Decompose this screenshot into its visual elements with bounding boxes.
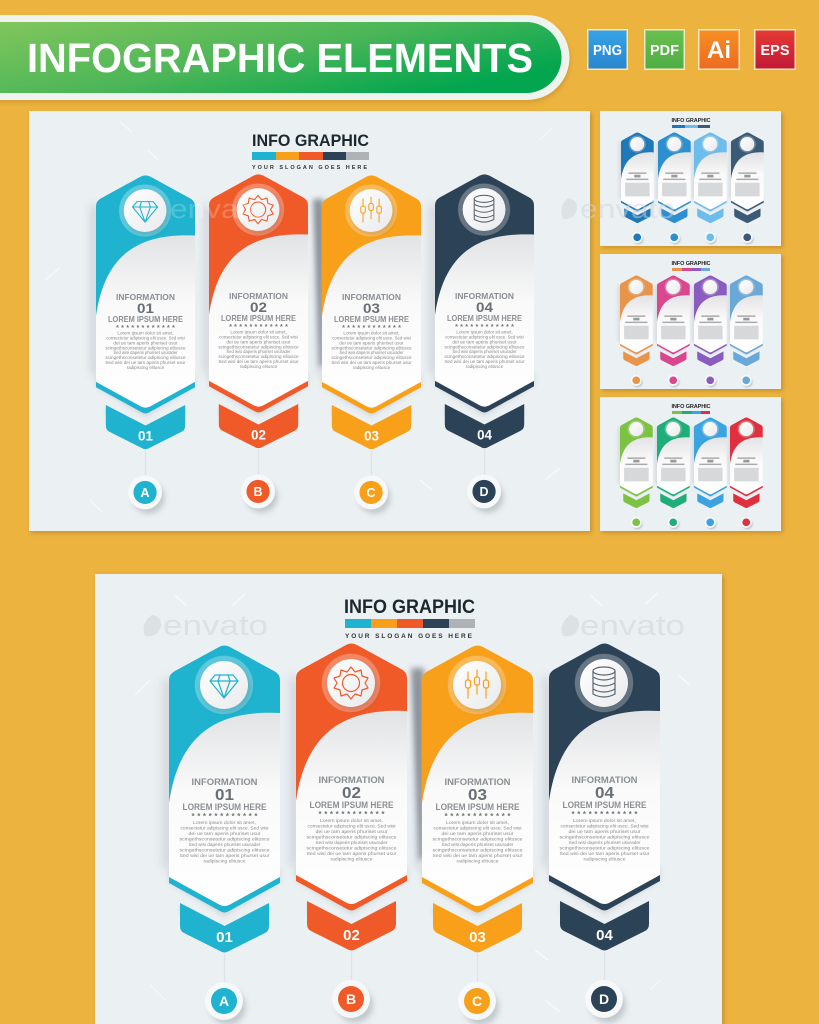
text block: radipiscing elitusce (330, 856, 373, 862)
icon: coin stack (474, 195, 494, 222)
text block: Lorem ipsum dolor sit amet, (193, 820, 256, 825)
mini card 1 (618, 275, 653, 387)
text block: INFORMATION (572, 775, 638, 785)
text block: INFORMATION (116, 293, 175, 302)
text block: LOREM IPSUM HERE (562, 800, 646, 810)
text block (105, 293, 186, 370)
text block: INFORMATION (455, 292, 514, 301)
text block: scingethsconsetetur adipiscing elitusce (560, 834, 650, 840)
text block (180, 777, 270, 864)
watermark: envato (170, 194, 265, 224)
text block: dei ue tam aperis phuriset usur (452, 339, 517, 344)
tab number: 03 (364, 429, 379, 444)
text block: scingethsconsetetur adipiscing elitusce (105, 345, 186, 350)
text block: consectetur adipiscing elit usce. Sed wisi (219, 334, 298, 339)
text block: Sed wisi daperis phuriset usurader (113, 350, 178, 355)
text block: dei ue tam aperis phuriset usur (188, 831, 261, 836)
card 02 (204, 174, 308, 513)
text block: 03 (363, 301, 380, 317)
heading: INFO GRAPHIC (252, 131, 369, 150)
mini card 4 (729, 132, 764, 244)
text block: Lorem ipsum dolor sit amet, (446, 820, 509, 825)
tab number: 03 (469, 929, 486, 946)
text block: scingethsconsetetur adipiscing elitusce (105, 355, 186, 360)
mini card 4 (728, 417, 763, 529)
text block: 02 (250, 300, 267, 316)
text block: scingethsconsetetur adipiscing elitusce (218, 354, 299, 359)
letter marker: C (472, 993, 482, 1009)
format badge: EPS (754, 29, 796, 70)
text block (331, 293, 412, 370)
text block: radipiscing elitusce (353, 365, 391, 370)
text block: Sed wisi dei ue tam aperis phurset usur (306, 851, 397, 856)
card 01 (91, 175, 195, 514)
watermark: envato (580, 194, 675, 224)
text block: LOREM IPSUM HERE (108, 315, 184, 324)
heading (344, 597, 475, 640)
text block: Sed wisi daperis phuriset usurader (442, 842, 514, 847)
format badge: Ai (698, 29, 740, 70)
panel: large preview (95, 574, 724, 1024)
text block: scingethsconsetetur adipiscing elitusce (180, 848, 270, 852)
text block (444, 292, 525, 369)
colour bar (252, 152, 369, 160)
letter marker: D (599, 991, 609, 1007)
format badge: EPS: EPS (760, 42, 790, 59)
format badge: PDF (644, 29, 685, 70)
text block: ************ (318, 810, 385, 819)
mini colour bar (672, 125, 710, 128)
text block: 04 (476, 300, 493, 316)
text block: radipiscing elitusce (584, 856, 626, 862)
text block: LOREM IPSUM HERE (436, 802, 520, 812)
text block: 01 (137, 301, 154, 317)
text block: scingethsconsetetur adipiscing elitusce (331, 345, 412, 350)
text block: scingethsconsetetur adipiscing elitusce (218, 344, 299, 349)
mini card 2 (655, 417, 690, 529)
title banner (0, 15, 570, 103)
text block: dei ue tam aperis phuriset usur (339, 340, 404, 345)
heading: INFO GRAPHIC (344, 597, 475, 618)
text block: scingethsconsetetur adipiscing elitusce (306, 846, 397, 850)
text block: 02 (342, 785, 361, 802)
icon: sliders (361, 197, 381, 222)
banner title text: INFOGRAPHIC ELEMENTS (27, 35, 533, 81)
text block: dei ue tam aperis phuriset usur (442, 831, 514, 836)
text block: radipiscing elitusce (127, 365, 165, 370)
text block (432, 777, 523, 864)
mini colour bar (672, 411, 710, 414)
text block: Lorem ipsum dolor sit amet, (117, 331, 174, 336)
mini heading: INFO GRAPHIC (672, 261, 711, 267)
letter marker: A (219, 993, 229, 1009)
letter marker: C (367, 486, 376, 500)
card 04 (543, 644, 660, 1023)
colour bar (345, 619, 475, 628)
text block: Sed wisi daperis phuriset usurader (316, 840, 388, 845)
tab number: 02 (343, 927, 360, 944)
text block: INFORMATION (229, 292, 288, 301)
mini card 3 (692, 132, 727, 244)
letter marker: A (141, 486, 150, 500)
mini card 1 (619, 132, 654, 244)
mini heading: INFO GRAPHIC (672, 404, 711, 410)
text block: dei ue tam aperis phuriset usur (113, 340, 178, 345)
text block: ************ (342, 324, 401, 332)
card 03 (313, 175, 421, 514)
text block: scingethsconsetetur adipiscing elitusce (444, 344, 525, 349)
text block: consectetur adipiscing elit usce. Sed wisi (560, 824, 648, 828)
panel: main preview (29, 111, 592, 533)
icon: sliders (466, 670, 488, 698)
text block: scingethsconsetetur adipiscing elitusce (432, 848, 523, 852)
text block: Sed wisi daperis phuriset usurader (339, 350, 404, 355)
watermark (144, 610, 268, 642)
panel: green variant (600, 397, 783, 533)
text block: radipiscing elitusce (240, 364, 278, 369)
letter marker: B (346, 991, 356, 1007)
text block: LOREM IPSUM HERE (310, 800, 394, 810)
icon: diamond (133, 202, 158, 222)
slogan: YOUR SLOGAN GOES HERE (252, 165, 367, 171)
text block: Lorem ipsum dolor sit amet, (456, 330, 513, 335)
card 02 (290, 644, 407, 1023)
text block: consectetur adipiscing elit usce. Sed wisi (332, 335, 411, 340)
text block: scingethsconsetetur adipiscing elitusce (432, 836, 523, 842)
tab number: 04 (477, 428, 492, 443)
panel: blue variant (600, 111, 783, 248)
text block: Sed wisi daperis phuriset usurader (452, 349, 517, 354)
icon: diamond (210, 675, 238, 698)
text block: consectetur adipiscing elit usce. Sed wisi (445, 334, 524, 339)
text block: 01 (215, 787, 234, 804)
text block: Lorem ipsum dolor sit amet, (343, 331, 400, 336)
text block: Sed wisi dei ue tam aperis phurset usur (331, 360, 412, 365)
icon: gear (334, 667, 368, 699)
text block: INFORMATION (444, 777, 510, 787)
mini card 1 (618, 417, 653, 529)
text block: dei ue tam aperis phuriset usur (316, 829, 388, 834)
mini heading: INFO GRAPHIC (672, 118, 711, 124)
panel: warm variant (600, 254, 783, 391)
text block: LOREM IPSUM HERE (182, 802, 266, 812)
tab number: 01 (138, 429, 153, 444)
format badge: PDF: PDF (650, 42, 679, 59)
text block: radipiscing elitusce (204, 858, 246, 864)
text block: Lorem ipsum dolor sit amet, (320, 818, 383, 823)
text block (560, 775, 650, 862)
text block: scingethsconsetetur adipiscing elitusce (331, 355, 412, 360)
text block: Sed wisi dei ue tam aperis phurset usur (180, 853, 270, 858)
tab number: 01 (216, 929, 233, 946)
mini card 3 (692, 417, 727, 529)
text block: consectetur adipiscing elit usce. Sed wisi (308, 824, 396, 828)
format badge: Ai: Ai (707, 37, 731, 64)
text block: dei ue tam aperis phuriset usur (226, 339, 291, 344)
watermark: envato (163, 610, 268, 642)
text block: Sed wisi dei ue tam aperis phurset usur (444, 359, 525, 364)
slogan: YOUR SLOGAN GOES HERE (345, 633, 473, 640)
icon: coin stack (593, 667, 615, 697)
tab number: 04 (596, 927, 613, 944)
card 01 (163, 646, 280, 1024)
text block: scingethsconsetetur adipiscing elitusce (306, 834, 397, 840)
format badge: PNG: PNG (593, 42, 622, 59)
format badge: PNG (587, 29, 628, 70)
text block: Sed wisi dei ue tam aperis phurset usur (560, 851, 650, 856)
card 04 (430, 174, 534, 513)
mini card 2 (656, 132, 691, 244)
text block: consectetur adipiscing elit usce. Sed wisi (106, 335, 185, 340)
text block: ************ (192, 812, 258, 821)
text block: 03 (468, 787, 487, 804)
icon: gear (243, 195, 273, 224)
card 03 (411, 646, 533, 1024)
text block: INFORMATION (318, 775, 384, 785)
mini card 3 (692, 275, 727, 387)
text block: Sed wisi daperis phuriset usurader (188, 842, 261, 847)
text block: scingethsconsetetur adipiscing elitusce (560, 846, 650, 850)
text block: ************ (572, 810, 638, 819)
mini card 4 (728, 275, 763, 387)
mini card 2 (655, 275, 690, 387)
letter marker: D (480, 485, 489, 499)
text block: Sed wisi daperis phuriset usurader (226, 349, 291, 354)
text block: Sed wisi dei ue tam aperis phurset usur (105, 360, 186, 365)
text block: ************ (455, 323, 514, 331)
text block: LOREM IPSUM HERE (221, 314, 297, 323)
letter marker: B (254, 485, 263, 499)
text block: Lorem ipsum dolor sit amet, (230, 330, 287, 335)
text block: ************ (116, 324, 175, 332)
text block (306, 775, 397, 862)
text block: consectetur adipiscing elit usce. Sed wisi (434, 826, 522, 830)
watermark: envato (580, 610, 685, 642)
text block: radipiscing elitusce (456, 858, 499, 864)
text block (218, 292, 299, 369)
text block: LOREM IPSUM HERE (334, 315, 410, 324)
text block: scingethsconsetetur adipiscing elitusce (180, 836, 270, 842)
text block: LOREM IPSUM HERE (447, 314, 523, 323)
text block: ************ (444, 812, 511, 821)
text block: dei ue tam aperis phuriset usur (568, 829, 641, 834)
text block: INFORMATION (342, 293, 401, 302)
text block: Sed wisi daperis phuriset usurader (568, 840, 641, 845)
heading (252, 131, 369, 171)
text block: scingethsconsetetur adipiscing elitusce (444, 354, 525, 359)
text block: Sed wisi dei ue tam aperis phurset usur (218, 359, 299, 364)
text block: radipiscing elitusce (466, 364, 504, 369)
text block: ************ (229, 323, 288, 331)
text block: consectetur adipiscing elit usce. Sed wisi (180, 826, 268, 830)
text block: Lorem ipsum dolor sit amet, (573, 818, 636, 823)
tab number: 02 (251, 428, 266, 443)
mini colour bar (672, 268, 710, 271)
text block: 04 (595, 785, 614, 802)
text block: Sed wisi dei ue tam aperis phurset usur (432, 853, 523, 858)
text block: INFORMATION (192, 777, 258, 787)
